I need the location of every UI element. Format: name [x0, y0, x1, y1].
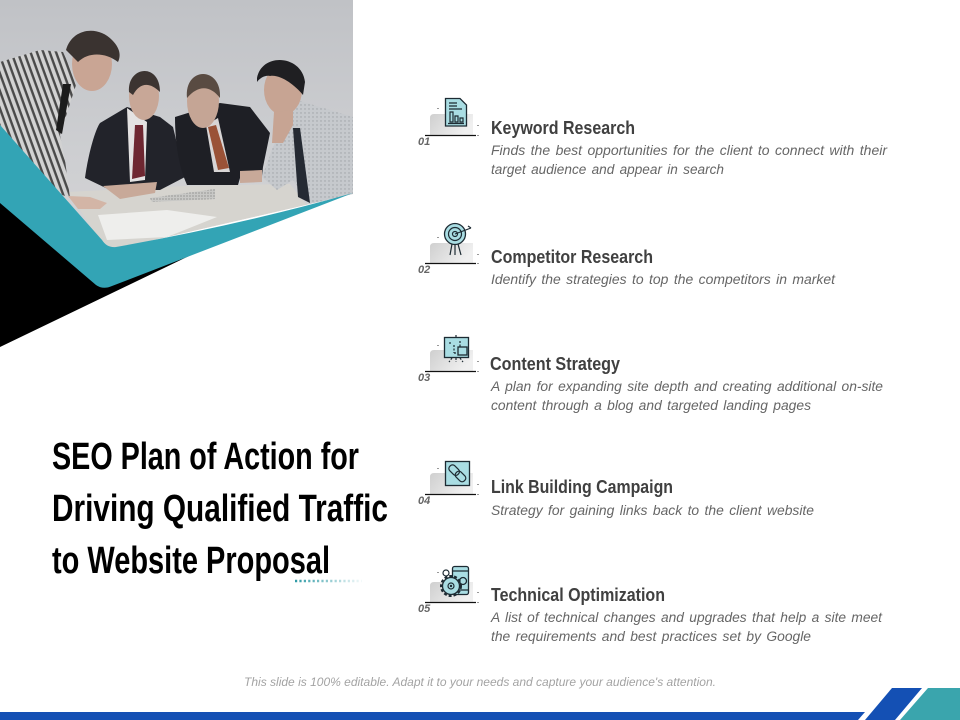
title: Driving Qualified Traffic	[52, 488, 388, 530]
description: the requirements and best practices set by Google	[491, 629, 811, 644]
heading: Technical Optimization	[491, 585, 665, 605]
number 05: 05	[418, 603, 431, 615]
number 03: 03	[418, 372, 430, 384]
icon: gears and phone	[425, 566, 478, 603]
heading: Content Strategy	[490, 354, 620, 374]
description	[491, 143, 888, 177]
description: target audience and appear in search	[491, 162, 724, 177]
description: A list of technical changes and upgrades that help a site meet	[490, 610, 883, 625]
item 4: link building campaign	[418, 462, 814, 518]
heading: Keyword Research	[491, 118, 635, 138]
description: content through a blog and targeted landing pages	[491, 398, 811, 413]
teal swoosh band	[0, 125, 353, 288]
item 3: content strategy	[418, 335, 883, 413]
description: Strategy for gaining links back to the client website	[491, 503, 814, 518]
blue corner parallelogram	[865, 688, 922, 720]
item 1: keyword research	[418, 98, 888, 177]
hero photo: four businessmen at a table	[0, 0, 353, 255]
number 01: 01	[418, 136, 430, 148]
dotted accent under title	[295, 580, 362, 582]
description	[490, 610, 883, 644]
icon: chain link	[425, 462, 478, 495]
number 04: 04	[418, 495, 430, 507]
title	[52, 436, 388, 582]
icon: document with bar chart	[425, 98, 478, 136]
description: Identify the strategies to top the competitors in market	[491, 272, 836, 287]
number 02: 02	[418, 264, 430, 276]
footer note: This slide is 100% editable. Adapt it to your needs and capture your audience's attention.	[244, 677, 716, 689]
icon: presentation board	[425, 335, 478, 372]
title: to Website Proposal	[52, 540, 330, 582]
icon: target on tripod	[425, 224, 478, 264]
bottom bar	[0, 712, 865, 720]
description	[490, 379, 883, 413]
heading: Competitor Research	[491, 247, 653, 267]
black corner shape	[0, 200, 190, 347]
heading: Link Building Campaign	[491, 477, 673, 497]
description: A plan for expanding site depth and creating additional on-site	[490, 379, 883, 394]
item 2: competitor research	[418, 224, 836, 287]
item 5: technical optimization	[418, 566, 883, 644]
teal corner shape	[900, 688, 960, 720]
description: Finds the best opportunities for the client to connect with their	[491, 143, 888, 158]
title: SEO Plan of Action for	[52, 436, 359, 478]
